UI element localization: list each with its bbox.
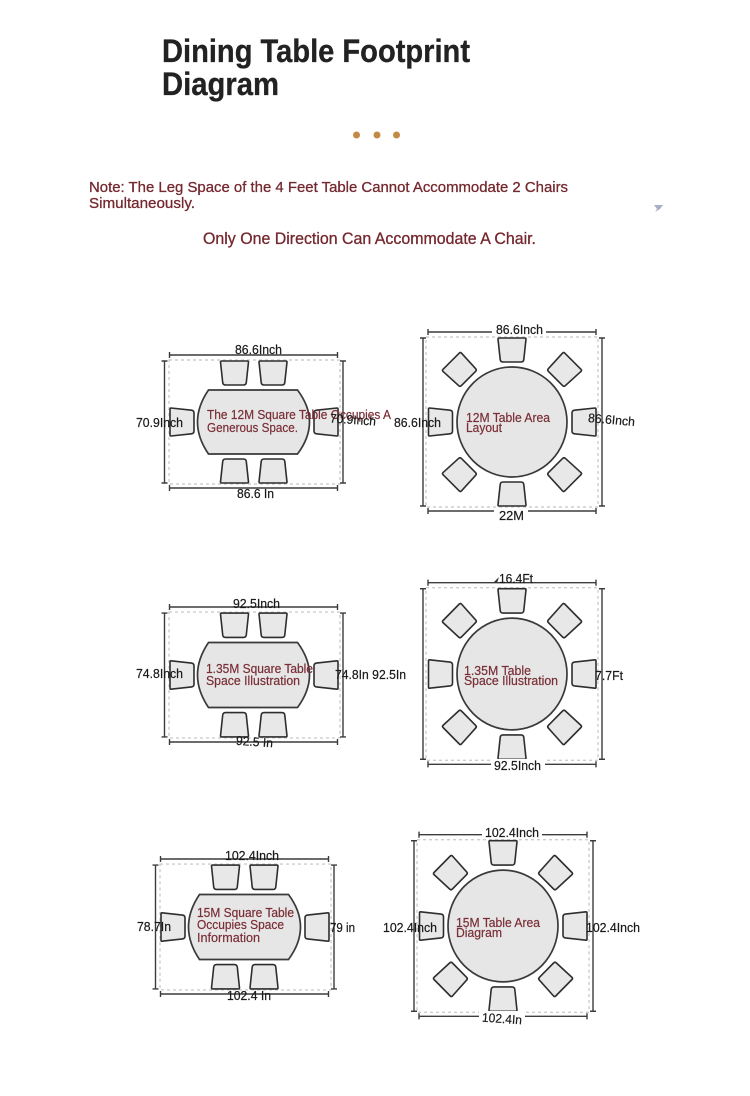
dimension labels [383,826,640,1027]
dimension labels: 102.4Inch [586,921,640,935]
decorative dots [353,132,400,138]
table caption [206,662,313,688]
dimension labels: 70.9Inch [136,416,183,430]
rectangular table drawing [162,604,346,745]
title: Diagram [162,66,279,102]
dimension labels: 86.6 In [237,487,274,501]
panel: 1.5M round table [383,826,640,1027]
table caption [456,916,540,940]
note text: Simultaneously. [89,195,195,212]
panel: 1.35M rectangular table [136,597,406,750]
round table drawing [420,329,605,514]
table caption: 1.35M Square Table [206,662,313,676]
dimension labels [491,572,624,773]
table caption: Layout [466,421,503,435]
table caption [466,411,550,435]
round table drawing [411,832,596,1019]
panel: 1.5M rectangular table [137,849,355,1003]
note text: Note: The Leg Space of the 4 Feet Table Cannot Accommodate 2 Chairs [89,179,568,196]
dimension labels: 16.4Ft [499,572,534,586]
dimension labels: 92.5Inch [233,597,280,611]
table caption: Space Illustration [464,674,558,688]
dimension labels: 86.6Inch [394,416,441,430]
dimension labels: 102.4Inch [225,849,279,863]
title [162,33,470,102]
panel: 1.35M round table [420,572,624,773]
panel: 1.2M round table [394,323,636,523]
table caption [197,906,294,945]
rectangular table drawing [162,352,346,491]
rectangular table drawing [152,856,337,997]
dimension labels [136,597,406,750]
dimension labels [136,343,376,501]
table caption: Occupies Space [197,918,284,932]
dimension labels: 92.5Inch [494,759,541,773]
table caption: 15M Square Table [197,906,294,920]
round table drawing [420,580,605,767]
dimension labels: 86.6Inch [496,323,543,337]
dimension labels: 74.8Inch [136,667,183,681]
dimension labels: 102.4Inch [383,921,437,935]
dimension labels: 79 in [330,921,355,935]
table caption: Space Illustration [206,674,300,688]
dimension labels: 86.6Inch [235,343,282,357]
table caption: Information [197,931,260,945]
panel: 1.2M rectangular table [136,343,392,501]
dimension labels: 102.4Inch [485,826,539,840]
dimension labels: 74.8In 92.5In [335,668,406,682]
dimension labels [137,849,355,1003]
table caption [207,408,392,435]
dimension labels: 86.6Inch [587,411,636,429]
title: Dining Table Footprint [162,33,470,69]
table caption: 1.35M Table [464,664,531,678]
dimension labels: 78.7In [137,920,171,934]
dimension labels: 7.7Ft [595,669,624,683]
dimension labels [394,323,636,523]
table caption: Diagram [456,926,502,940]
table caption [464,664,558,688]
table caption: 15M Table Area [456,916,540,930]
table caption: 12M Table Area [466,411,550,425]
small gem mark [654,205,663,212]
table caption: The 12M Square Table Occupies A [207,408,392,422]
dimension labels: 92.5 In [236,734,273,750]
dimension labels: 102.4 In [227,989,271,1003]
dimension labels: 22M [499,509,524,523]
table caption: Generous Space. [207,421,298,435]
dimension labels: 102.4In [482,1011,522,1027]
dimension labels: 70.9Inch [330,411,376,429]
note text [89,179,568,212]
subheading: Only One Direction Can Accommodate A Chair. [203,230,536,248]
